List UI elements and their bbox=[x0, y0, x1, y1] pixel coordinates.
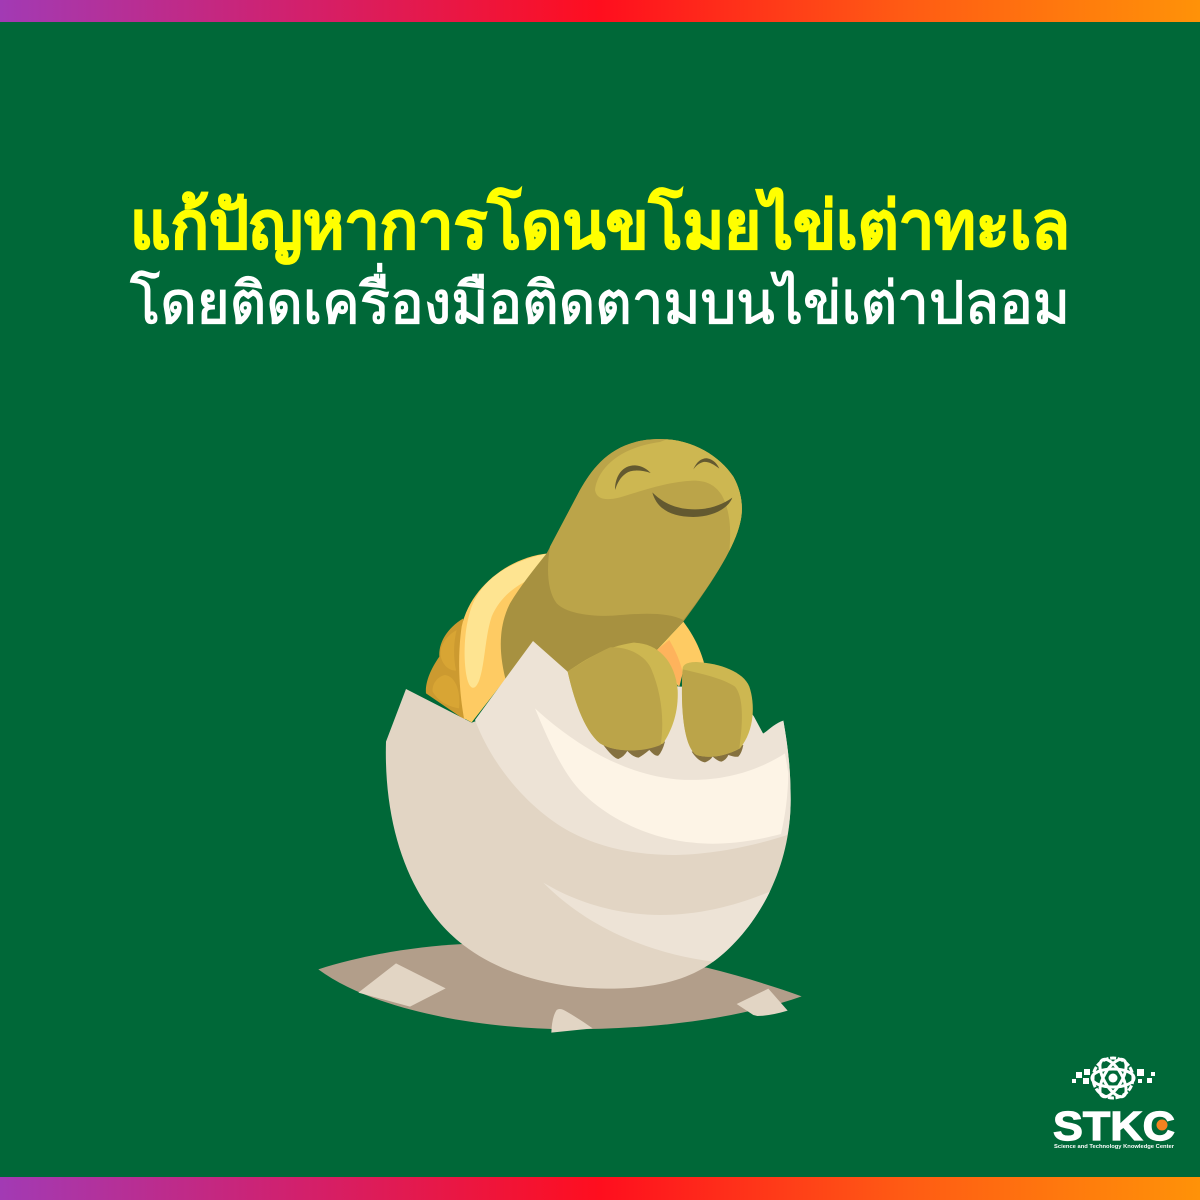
title bbox=[130, 186, 1070, 336]
right paw claws bbox=[692, 745, 743, 762]
bottom gradient bar bbox=[0, 1177, 1200, 1200]
title line 1: แก้ปัญหาการโดนขโมยไข่เต่าทะเล bbox=[130, 186, 1070, 264]
shell right bbox=[657, 622, 704, 687]
turtle body behind egg bbox=[426, 437, 750, 722]
head highlight bbox=[595, 437, 750, 553]
ground shadow with shell chips bbox=[318, 944, 802, 1033]
turtle front paws bbox=[568, 643, 753, 762]
illustration: turtle hatching from egg bbox=[318, 437, 802, 1033]
right paw bbox=[682, 662, 753, 757]
top gradient bar bbox=[0, 0, 1200, 22]
neck and head bbox=[501, 439, 742, 687]
egg shell bbox=[386, 641, 800, 989]
eyes and smile bbox=[615, 465, 651, 490]
logo tagline: Science and Technology Knowledge Center bbox=[1054, 1144, 1175, 1150]
STKC logo bbox=[1053, 1055, 1175, 1150]
left paw claws bbox=[603, 742, 665, 759]
title line 2: โดยติดเครื่องมือติดตามบนไข่เต่าปลอม bbox=[130, 263, 1070, 336]
logo orange dot bbox=[1156, 1120, 1168, 1130]
shell left bbox=[459, 553, 553, 722]
logo atom icon bbox=[1072, 1055, 1155, 1101]
left paw bbox=[568, 643, 678, 750]
logo wordmark: STKC bbox=[1053, 1103, 1175, 1149]
back scutes bbox=[426, 618, 465, 720]
